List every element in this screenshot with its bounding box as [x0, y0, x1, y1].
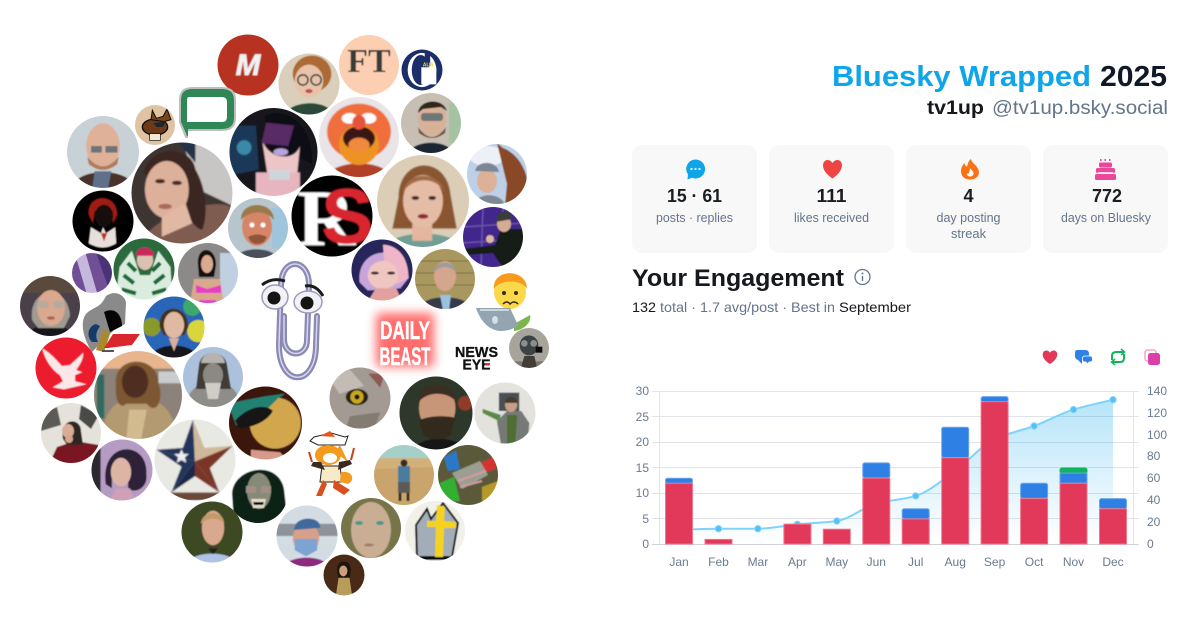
month labels: Jun: [867, 555, 886, 569]
logo: Daily Beast: [376, 313, 434, 371]
month labels: Apr: [788, 555, 807, 569]
avatar: bald man with glasses: [66, 115, 140, 189]
icon: quote pages: [1145, 350, 1160, 365]
left axis labels: [636, 384, 649, 551]
left axis labels: 30: [636, 384, 649, 398]
avatar: woman in pink bikini: [177, 242, 240, 305]
engagement summary: total · 1.7 avg/post · Best in: [660, 299, 835, 315]
icon: info: [855, 270, 870, 284]
engagement summary: September: [839, 299, 911, 315]
avatar: anime girl: [228, 107, 319, 199]
month labels: Dec: [1102, 555, 1124, 569]
card: likes received: 111: [816, 186, 846, 206]
emoji: worried person with laptop: [476, 273, 530, 331]
avatar cluster: [19, 33, 550, 596]
avatar: woman with dark hair: [130, 141, 234, 245]
avatar: man in blue shirt: [180, 500, 244, 564]
avatar: RS logo: S: [321, 172, 373, 260]
card: posts and replies: [632, 145, 757, 253]
cumulative area: [679, 400, 1113, 544]
right axis labels: 60: [1147, 471, 1161, 485]
month labels: Aug: [945, 555, 966, 569]
avatar: cookie with hat: [228, 385, 303, 461]
right axis labels: 140: [1147, 384, 1167, 398]
left axis labels: 5: [642, 512, 649, 526]
avatar: bearded man: [398, 375, 474, 451]
heading: Your Engagement: Your Engagement: [632, 265, 844, 292]
cumulative line: [679, 400, 1113, 530]
card: days on Bluesky: 772: [1092, 186, 1122, 206]
right axis labels: 20: [1147, 515, 1161, 529]
avatar: woman in gold jacket: [93, 350, 183, 440]
handle: tv1up: [927, 98, 984, 119]
right axis labels: [1147, 384, 1167, 551]
avatar: Independent eagle logo: [34, 336, 98, 400]
icon: chat bubbles: [1075, 350, 1092, 364]
avatar: green P logo: [180, 88, 235, 137]
avatar: man in grey blazer: [473, 381, 537, 445]
avatar: M logo: [216, 33, 280, 97]
avatar: grey hooded cartoon: [83, 293, 140, 352]
month labels: Mar: [748, 555, 768, 569]
avatar: blurred blonde woman: [340, 497, 402, 559]
avatar: cartoon bull: [134, 104, 176, 146]
avatar: woman with glasses left: [19, 275, 81, 337]
avatar: man with blue mask: [275, 504, 339, 568]
month labels: Nov: [1063, 555, 1084, 569]
logo: News Eye: EYE: [462, 356, 490, 374]
avatar: Texas star: [153, 418, 237, 502]
avatar: woman with curly hair: [90, 438, 154, 502]
avatar: FT logo: [338, 34, 400, 96]
avatar: man with orange face: [227, 197, 290, 259]
card: posts and replies: 15 · 61: [667, 186, 722, 206]
chart legend icons: [1043, 349, 1160, 365]
engagement summary: [632, 299, 911, 315]
icon: heart: [1043, 350, 1057, 364]
right axis labels: 100: [1147, 428, 1167, 442]
header: [832, 61, 1168, 119]
card: day posting streak: streak: [951, 227, 987, 241]
logo: Daily Beast: BEAST: [380, 343, 430, 371]
avatar: FT logo: FT: [347, 43, 391, 80]
month labels: [669, 555, 1124, 569]
avatar: Elsa: [350, 238, 414, 302]
logo: News Eye: NEWS: [455, 344, 498, 361]
avatar: woman with colourful background: [144, 296, 204, 358]
handle: [927, 98, 1168, 119]
avatar: woman in red jumper: [40, 402, 102, 464]
avatar: woman with auburn hair: [375, 153, 471, 249]
avatar: woman with glasses: [277, 52, 341, 116]
right axis labels: 40: [1147, 493, 1161, 507]
avatar: colourful 3D letters: [437, 444, 499, 506]
right axis labels: 80: [1147, 449, 1161, 463]
avatar: man with horse: [466, 143, 528, 205]
engagement summary: 132: [632, 299, 656, 315]
left axis labels: 25: [636, 410, 649, 424]
month labels: Sep: [984, 555, 1006, 569]
month labels: Oct: [1025, 555, 1044, 569]
card: posts and replies: posts · replies: [656, 211, 733, 225]
chart: monthly engagement: [636, 384, 1167, 569]
logo: Daily Beast: DAILY: [380, 317, 430, 345]
avatar: Genghis Khan statue: [182, 346, 244, 408]
panel: stat cards: [632, 145, 1168, 253]
month labels: Feb: [708, 555, 729, 569]
month labels: Jul: [908, 555, 923, 569]
avatar: RS logo: R: [297, 174, 357, 264]
avatar: man with sunglasses: [400, 92, 463, 154]
left axis labels: 0: [642, 537, 649, 551]
avatar: robot: [508, 327, 550, 369]
right axis labels: 0: [1147, 537, 1154, 551]
card: likes received: likes received: [794, 211, 869, 225]
stacked bars: [666, 397, 1126, 544]
card: day posting streak: day posting: [936, 211, 1001, 225]
card: days on Bluesky: [1043, 145, 1168, 253]
avatar: Guardian Australia logo: [401, 49, 443, 91]
avatar: Guardian Australia logo: AUS: [423, 63, 434, 69]
avatar: Animal muppet: [318, 96, 400, 178]
avatar: RS logo: [292, 176, 372, 256]
avatar: dark red hooded figure: [71, 189, 135, 253]
avatar: man on purple wall: [462, 206, 524, 268]
card: day posting streak: 4: [963, 186, 974, 206]
avatar: green skull figure: [231, 469, 286, 523]
avatar: woman in green print: [112, 237, 176, 301]
title: 2025: [1100, 61, 1167, 93]
avatar: man at brick wall: [414, 248, 476, 310]
avatar: owl eye: [328, 366, 392, 430]
avatar: hiker in field: [373, 444, 435, 506]
avatar: cowboy fox: [309, 431, 354, 496]
avatar: purple abstract: [71, 252, 113, 294]
avatar: small woman in gold dress: [323, 554, 365, 596]
month labels: Jan: [669, 555, 689, 569]
card: likes received: [769, 145, 894, 253]
cumulative points: [676, 396, 1116, 533]
right axis labels: 120: [1147, 406, 1167, 420]
title: Bluesky Wrapped: [832, 61, 1091, 93]
logo: News Eye: [455, 344, 498, 374]
avatar: M logo: M: [236, 49, 262, 82]
left axis labels: 15: [636, 461, 649, 475]
handle: @tv1up.bsky.social: [992, 98, 1168, 119]
clippy assistant: [262, 264, 323, 377]
card: day posting streak: [906, 145, 1031, 253]
icon: repost: [1112, 349, 1124, 365]
month labels: May: [825, 555, 848, 569]
card: days on Bluesky: days on Bluesky: [1061, 211, 1152, 225]
left axis labels: 20: [636, 435, 649, 449]
grid lines: [652, 391, 1139, 544]
avatar: mitre with yellow cross: [404, 500, 466, 562]
left axis labels: 10: [636, 486, 649, 500]
